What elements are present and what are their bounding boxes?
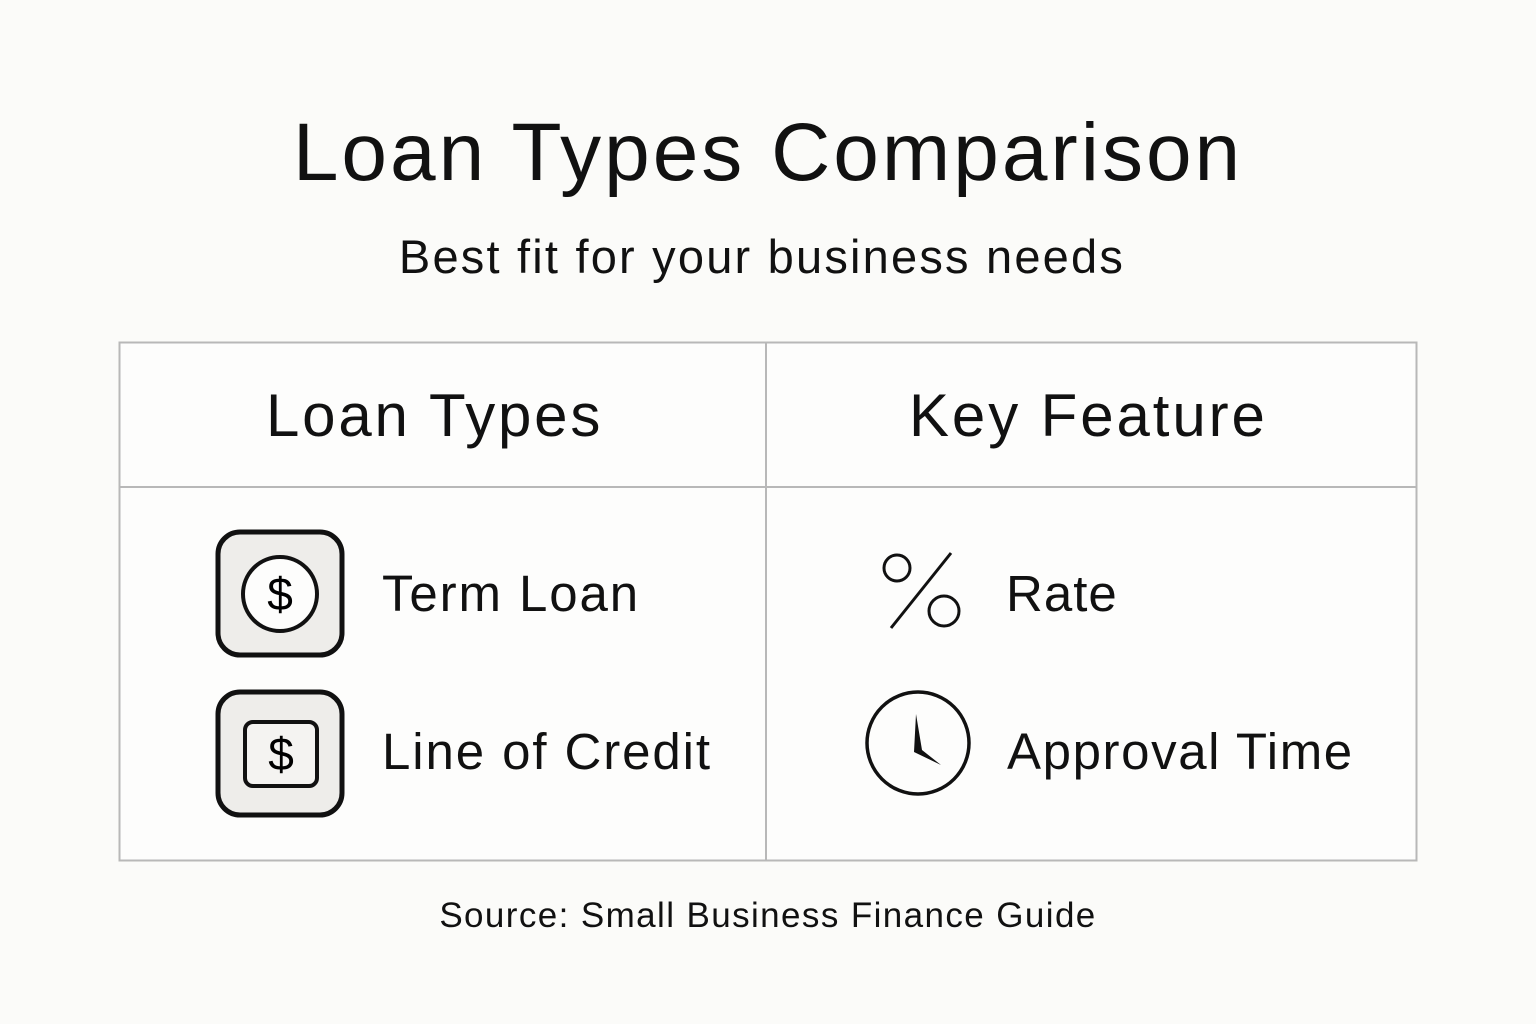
row text: term loan: Term Loan: [382, 565, 640, 622]
icon: percent: [884, 553, 959, 628]
header: loan types: Loan Types: [266, 382, 603, 449]
icon: line of credit card: $: [268, 728, 294, 780]
icon: term loan coin: $: [267, 568, 293, 620]
row text: approval time: Approval Time: [1007, 723, 1354, 780]
header: key feature: Key Feature: [909, 382, 1268, 449]
source note: Source: Small Business Finance Guide: [439, 896, 1097, 935]
icon: term loan coin: [218, 532, 342, 655]
title: Loan Types Comparison: [293, 107, 1243, 198]
icon: clock: [867, 692, 969, 794]
row text: rate: Rate: [1006, 565, 1118, 622]
icon: line of credit card: [218, 692, 342, 815]
row text: line of credit: Line of Credit: [382, 723, 712, 780]
subtitle: Best fit for your business needs: [399, 230, 1125, 283]
